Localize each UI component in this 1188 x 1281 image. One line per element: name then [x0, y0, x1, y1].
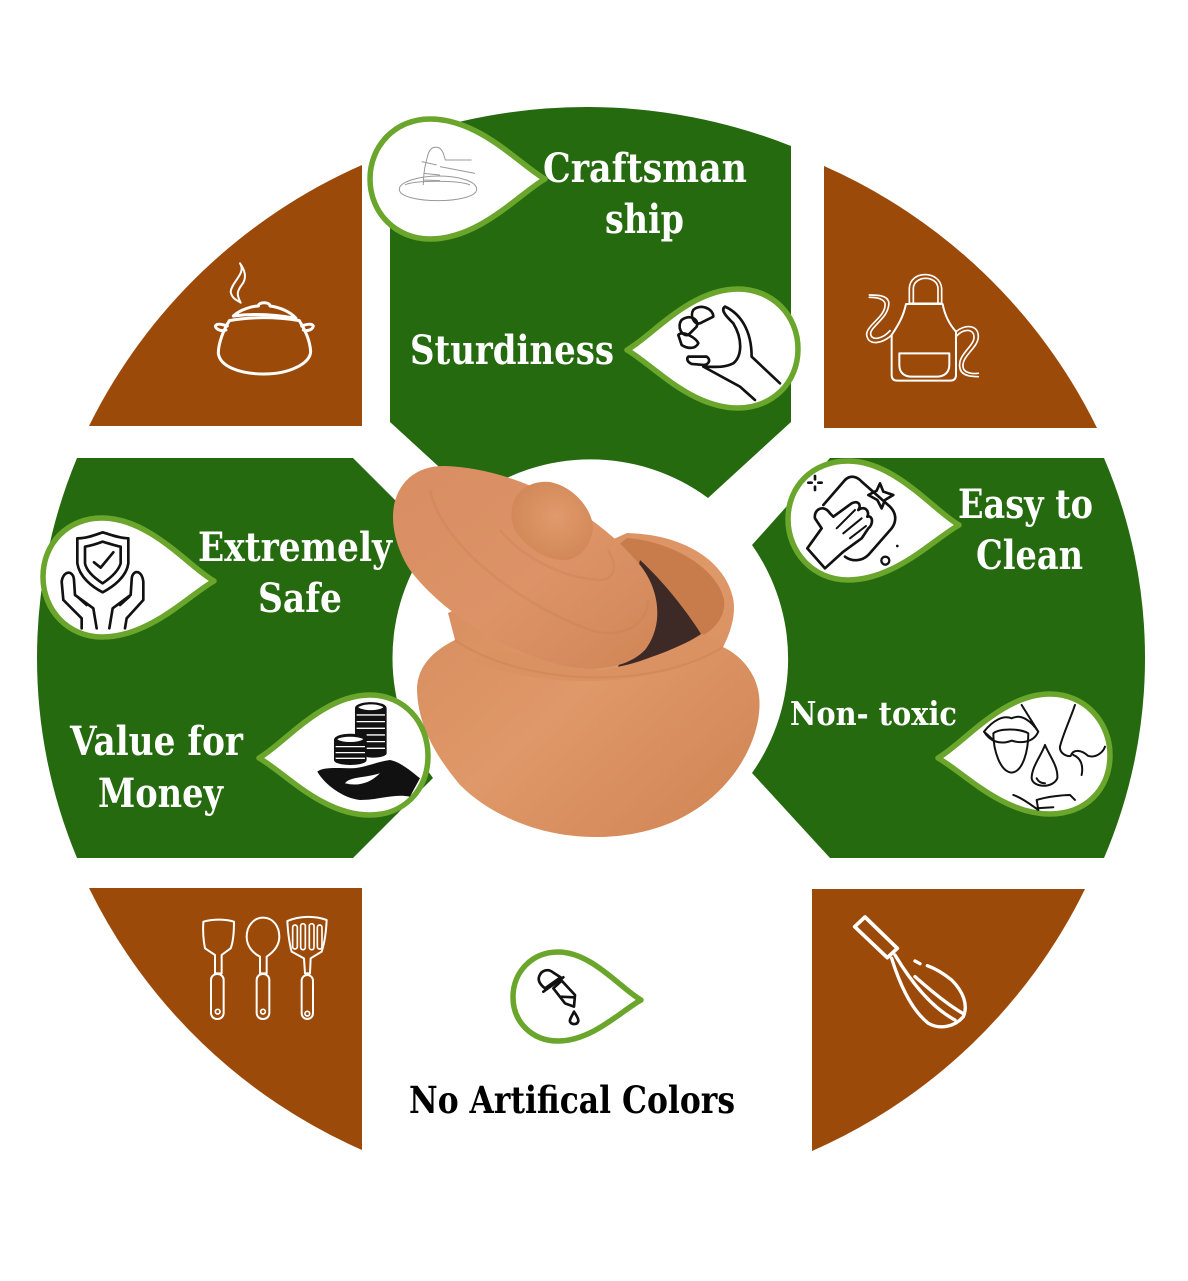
heading: Extremely Safe: [198, 524, 394, 622]
heading: Craftsmanship: Craftsman: [543, 145, 747, 192]
panel: brown bottom-left: [89, 888, 362, 1150]
panel: brown bottom-right: [812, 889, 1085, 1151]
icon: value for money coins and hand drop: [259, 695, 428, 815]
icon: whisk: [855, 917, 965, 1027]
heading: Easy to Clean: Easy to: [958, 481, 1093, 528]
heading: Extremely Safe: Safe: [258, 575, 342, 622]
icon: lid knob: [511, 482, 593, 560]
panel: green right: [752, 458, 1145, 858]
heading: Value for Money: Value for: [69, 718, 244, 765]
icon: easy to clean hand and cloth drop: [788, 461, 959, 580]
panel: green left: [37, 458, 433, 858]
heading: Easy to Clean: [958, 481, 1093, 579]
heading: Extremely Safe: Extremely: [198, 524, 394, 571]
icon: pot lid: [393, 466, 657, 669]
icon: non-toxic mouth, drop and nose drop: [938, 694, 1110, 814]
icon: steaming cooking pot: [215, 263, 313, 374]
icon: sturdiness clasped hands drop: [627, 289, 798, 408]
icon: dropper drop: [513, 952, 641, 1041]
heading: Non-toxic: Non- toxic: [790, 694, 957, 733]
panel: brown top-right: [824, 166, 1097, 428]
heading: Value for Money: Money: [98, 770, 224, 817]
icon: apron: [867, 275, 978, 381]
heading: No Artifical Colors: No Artifical Colors: [409, 1078, 735, 1122]
icon: craftsmanship drop: [370, 119, 545, 239]
heading: Craftsmanship: ship: [605, 196, 684, 243]
icon: kitchen utensils: [203, 917, 327, 1019]
heading: Value for Money: [69, 718, 244, 817]
panel: brown top-left: [89, 165, 362, 426]
heading: Sturdiness: Sturdiness: [410, 327, 614, 374]
panel: green top: [390, 107, 791, 498]
heading: Craftsmanship: [543, 145, 747, 243]
icon: clay pot with lid: [393, 466, 760, 837]
heading: Easy to Clean: Clean: [976, 532, 1083, 579]
icon: extremely safe shield hands drop: [43, 518, 214, 637]
